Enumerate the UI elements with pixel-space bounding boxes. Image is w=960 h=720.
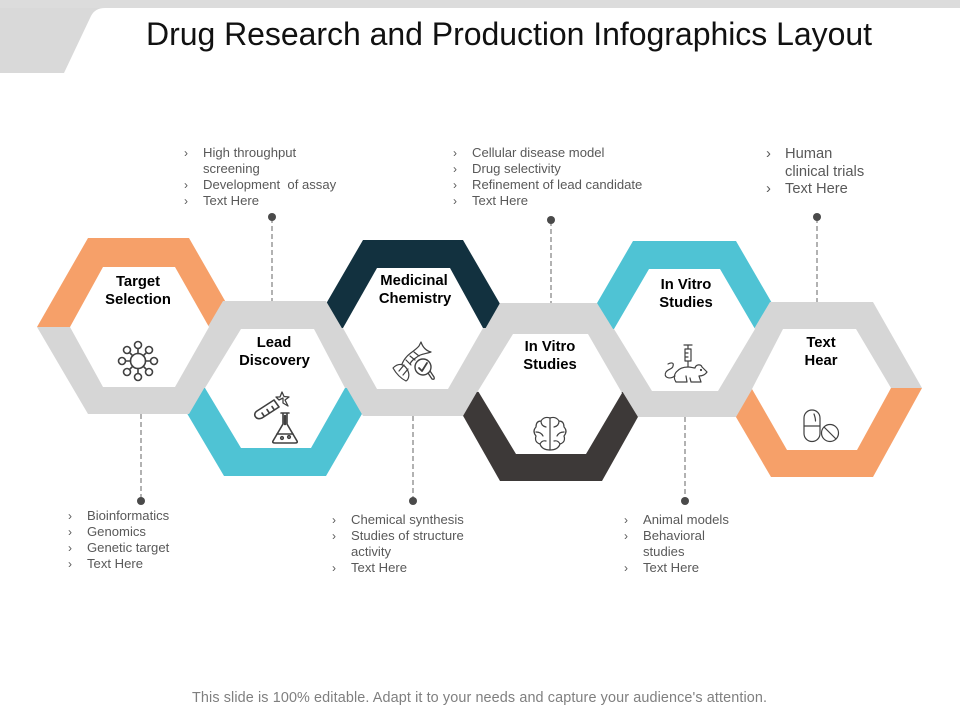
label: in vitro studies mouse: Studies <box>659 295 713 311</box>
connector: target selection <box>137 414 145 505</box>
text block: in vitro studies notes: › <box>453 146 457 160</box>
hexagon 1 top: orange <box>37 238 240 327</box>
label: text hear: Hear <box>805 353 838 369</box>
icon: pill and forbidden sign <box>804 410 838 442</box>
text block: text hear notes: Human <box>785 146 832 162</box>
text block: medicinal chemistry notes: Text Here <box>351 560 407 575</box>
connector: in vitro studies 2 <box>681 417 689 505</box>
label: target selection: Selection <box>105 292 171 308</box>
label: in vitro studies mouse <box>659 277 713 311</box>
text block: text hear notes: Text Here <box>785 181 848 197</box>
text block: target selection notes: › <box>68 557 72 571</box>
text block: in vitro studies notes: Drug selectivity <box>472 161 561 176</box>
text block: target selection notes: Text Here <box>87 556 143 571</box>
text block: animal studies notes: Behavioral <box>643 528 705 543</box>
label: target selection <box>105 274 171 308</box>
text block: medicinal chemistry notes <box>332 512 464 575</box>
text block: text hear notes: clinical trials <box>785 164 864 180</box>
icon: mouse with syringe <box>665 345 707 382</box>
text block: lead discovery notes: › <box>184 178 188 192</box>
text block: in vitro studies notes: Cellular disease model <box>472 145 605 160</box>
text block: target selection notes <box>68 508 170 571</box>
text block: medicinal chemistry notes: Chemical synthesis <box>351 512 464 527</box>
text block: medicinal chemistry notes: › <box>332 529 336 543</box>
text block: animal studies notes: studies <box>643 544 685 559</box>
label: lead discovery: Lead <box>257 335 291 351</box>
label: text hear <box>805 335 838 369</box>
text block: in vitro studies notes: › <box>453 162 457 176</box>
hexagon 5 top: teal <box>582 241 787 329</box>
text block: animal studies notes: Animal models <box>643 512 729 527</box>
hexagon 3 top: navy <box>312 240 514 328</box>
text block: target selection notes: › <box>68 525 72 539</box>
inner white hexagons <box>70 267 891 454</box>
icon: test tube and flask <box>255 392 297 443</box>
text block: in vitro studies notes <box>453 145 642 208</box>
text block: lead discovery notes: › <box>184 194 188 208</box>
label: lead discovery: Discovery <box>239 353 311 369</box>
icon: brain <box>534 417 566 450</box>
connector: text hear <box>813 213 821 302</box>
text block: medicinal chemistry notes: › <box>332 561 336 575</box>
text block: target selection notes: › <box>68 509 72 523</box>
hexagon 2 bottom: teal <box>172 388 377 476</box>
label: medicinal chemistry: Medicinal <box>380 273 448 289</box>
text block: lead discovery notes: screening <box>203 161 260 176</box>
text block: lead discovery notes: High throughput <box>203 145 297 160</box>
label: lead discovery <box>239 335 311 369</box>
text block: lead discovery notes: Text Here <box>203 193 259 208</box>
connector: lead discovery <box>268 213 276 301</box>
text block: medicinal chemistry notes: activity <box>351 544 391 559</box>
text block: medicinal chemistry notes: › <box>332 513 336 527</box>
title: Drug Research and Production Infographics Layout <box>146 16 872 52</box>
label: in vitro studies brain <box>523 339 577 373</box>
text block: target selection notes: Genetic target <box>87 540 170 555</box>
text block: target selection notes: Genomics <box>87 524 146 539</box>
text block: in vitro studies notes: › <box>453 178 457 192</box>
connector: in vitro studies 1 <box>547 216 555 303</box>
label: in vitro studies mouse: In Vitro <box>661 277 711 293</box>
text block: lead discovery notes: › <box>184 146 188 160</box>
text block: text hear notes: › <box>766 146 771 162</box>
text block: animal studies notes: › <box>624 561 628 575</box>
hexagon 6 bottom: orange <box>719 388 922 477</box>
footer note: This slide is 100% editable. Adapt it to your needs and capture your audience's attention. <box>192 690 767 706</box>
text block: in vitro studies notes: › <box>453 194 457 208</box>
label: in vitro studies brain: Studies <box>523 357 577 373</box>
text block: animal studies notes: Text Here <box>643 560 699 575</box>
text block: lead discovery notes <box>184 145 337 208</box>
grey ribbon <box>37 301 922 417</box>
hexagon chain <box>37 238 922 481</box>
connector: medicinal chemistry <box>409 416 417 505</box>
label: in vitro studies brain: In Vitro <box>525 339 575 355</box>
text block: animal studies notes: › <box>624 529 628 543</box>
text block: text hear notes <box>766 146 864 197</box>
text block: medicinal chemistry notes: Studies of structure <box>351 528 464 543</box>
text block: animal studies notes: › <box>624 513 628 527</box>
icon: DNA with magnifier <box>393 342 434 381</box>
text block: target selection notes: Bioinformatics <box>87 508 170 523</box>
header banner <box>0 0 960 73</box>
text block: in vitro studies notes: Text Here <box>472 193 528 208</box>
label: medicinal chemistry: Chemistry <box>379 291 452 307</box>
text block: in vitro studies notes: Refinement of lead candidate <box>472 177 642 192</box>
text block: text hear notes: › <box>766 181 771 197</box>
text block: lead discovery notes: Development of assay <box>203 177 337 192</box>
label: target selection: Target <box>116 274 160 290</box>
label: medicinal chemistry <box>379 273 452 307</box>
label: text hear: Text <box>806 335 836 351</box>
hexagon 4 bottom: dark grey <box>449 391 652 481</box>
text block: target selection notes: › <box>68 541 72 555</box>
text block: animal studies notes <box>624 512 729 575</box>
icon: molecule network <box>118 342 158 380</box>
